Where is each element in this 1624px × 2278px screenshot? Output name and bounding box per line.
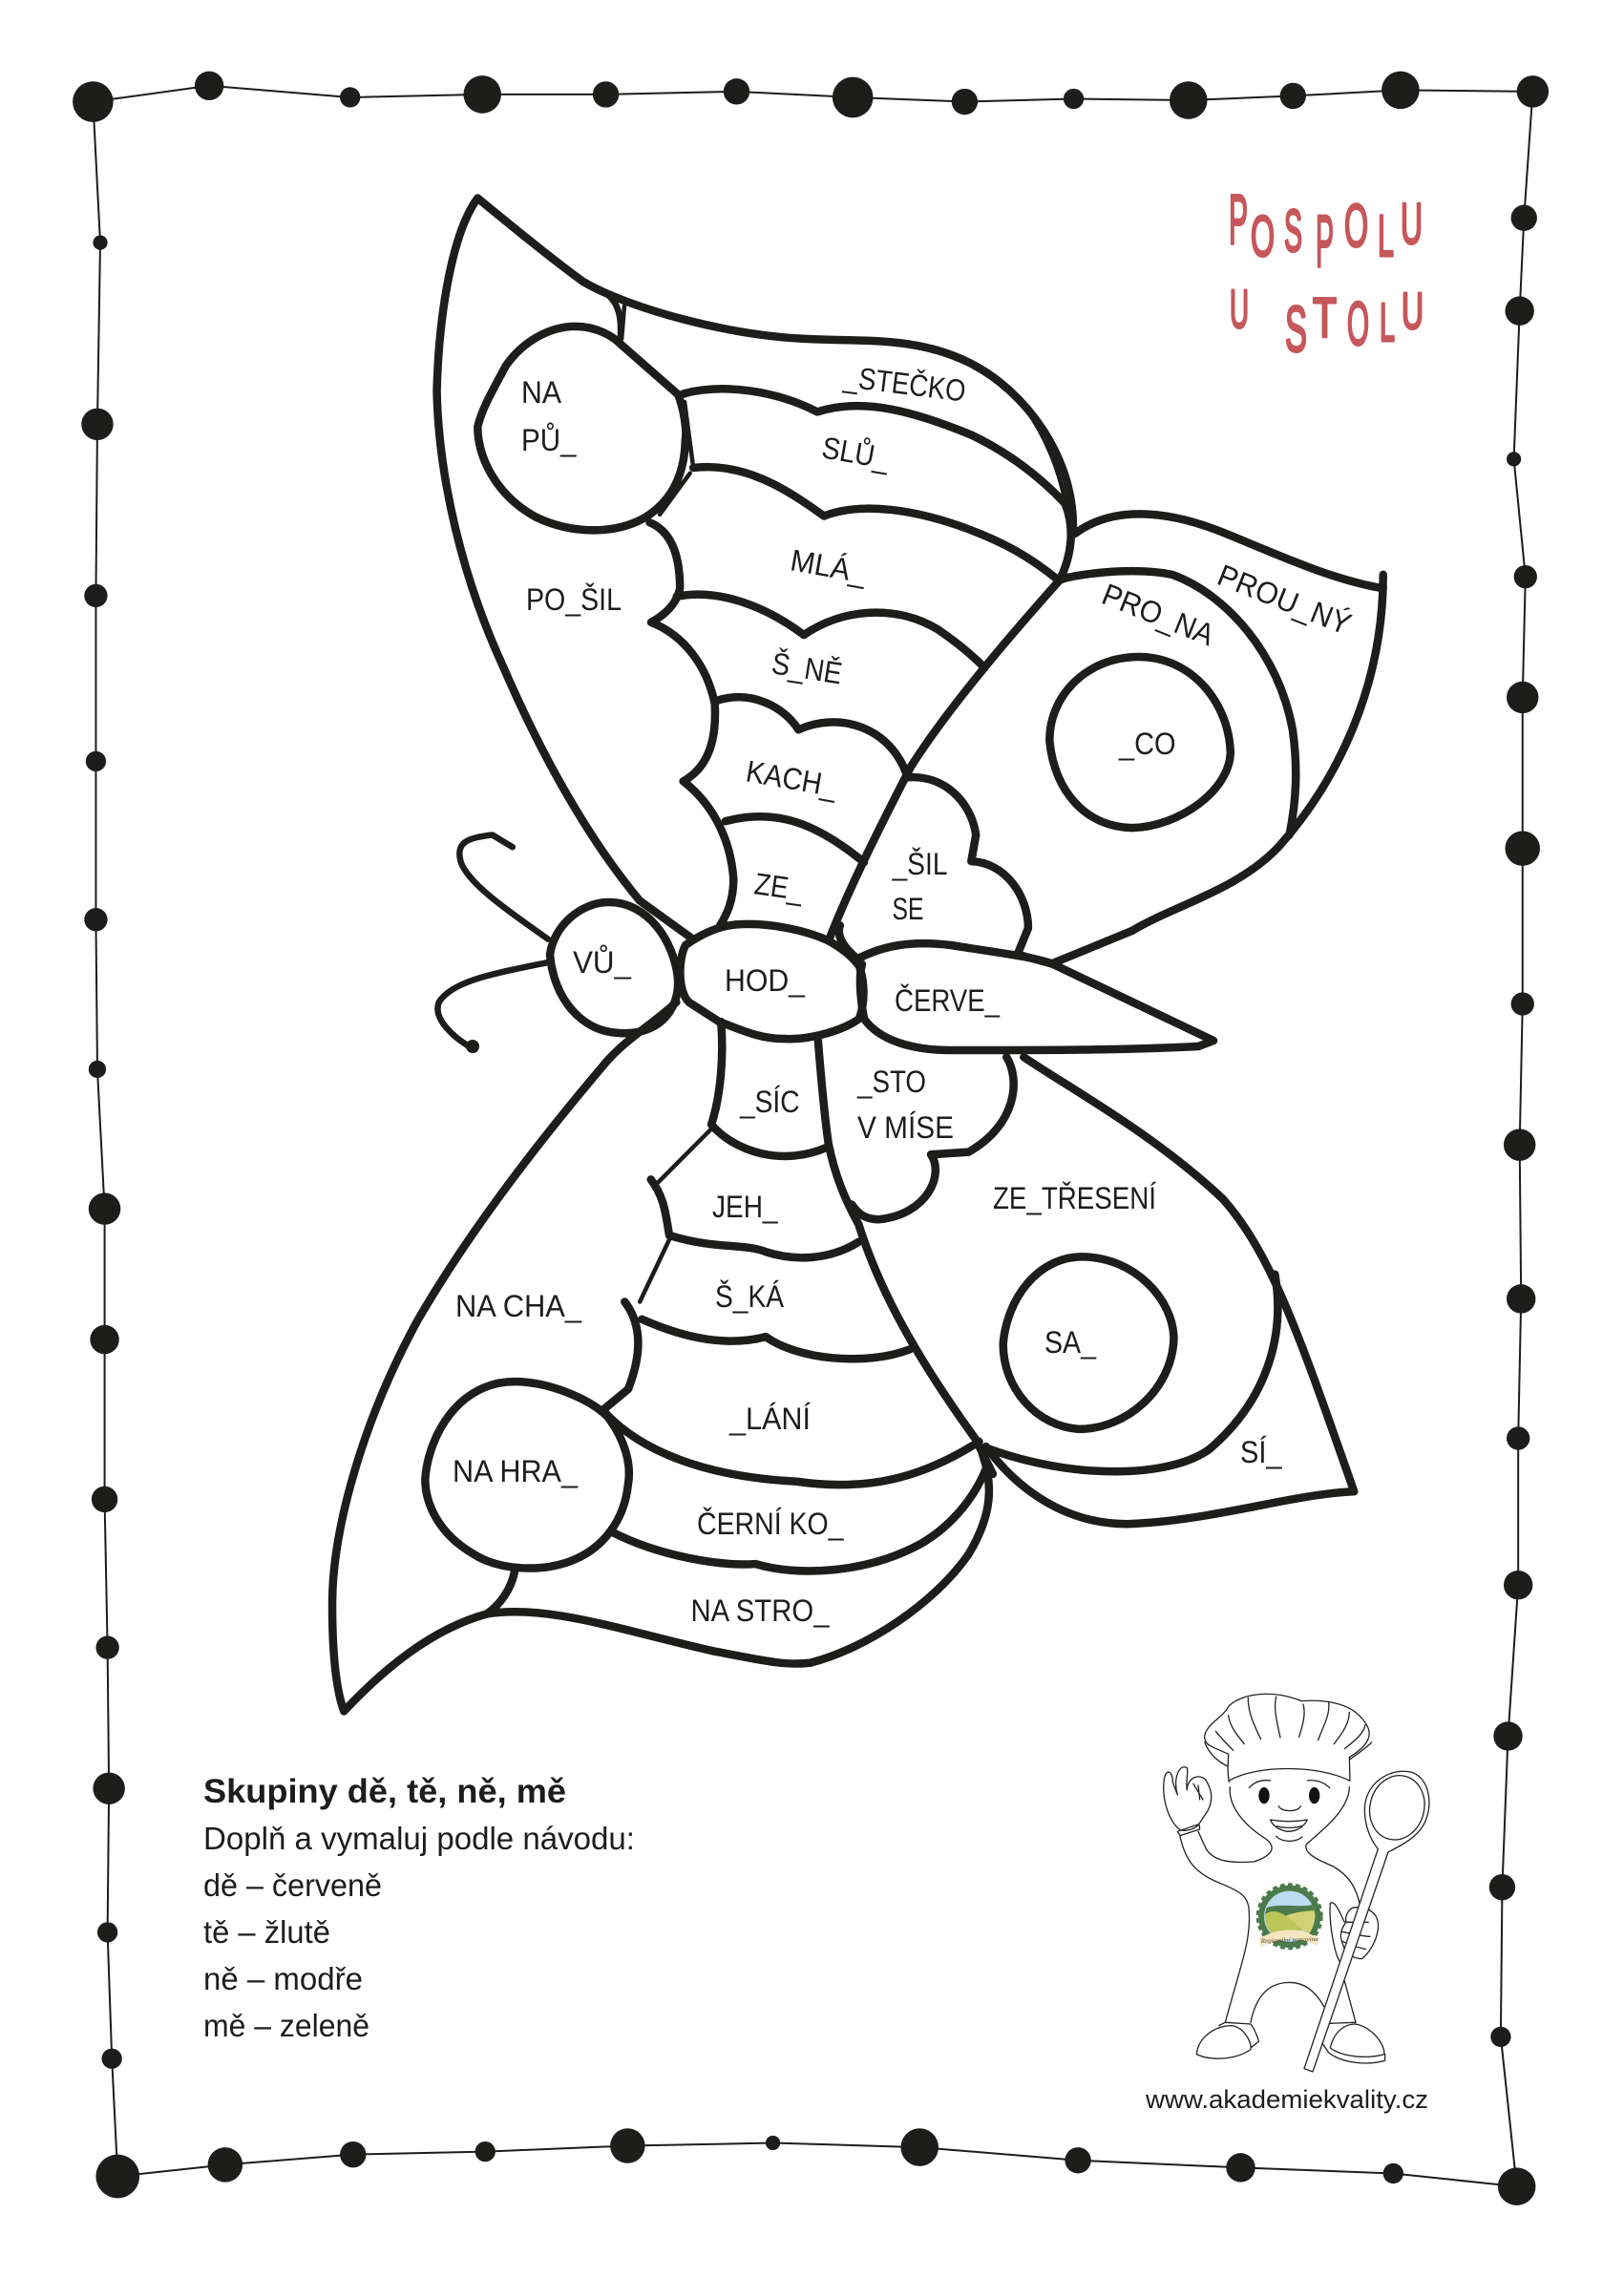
label: NA: NA [521,375,562,410]
label: MLÁ_: MLÁ_ [788,542,870,590]
title: Pospolu u stolu: O [1347,289,1369,358]
label: ČERVE_: ČERVE_ [895,983,1001,1018]
label: Š_KÁ: Š_KÁ [715,1279,785,1314]
heading: Skupiny: Skupiny dě, tě, ně, mě [203,1773,566,1810]
label: _STO: _STO [856,1065,926,1099]
regional food badge: Regionální potravina [1260,1936,1319,1945]
scallop: _ŠIL SE [839,777,1028,958]
legend: tě: tě – žlutě [203,1914,330,1950]
head: VŮ_ [550,902,678,1033]
label: ČERNÍ KO_: ČERNÍ KO_ [697,1507,845,1541]
butterfly word labels [453,359,1356,1628]
butterfly: lower wings and antenna [332,962,1354,1711]
chef face [1249,1781,1330,1841]
chef raised glove [1164,1767,1212,1836]
chef hat [1205,1694,1372,1782]
tail segment: ČERVE_ [856,943,1213,1050]
label: Š_NĚ: Š_NĚ [770,645,845,690]
label: NA CHA_: NA CHA_ [455,1289,582,1323]
label: PRO_NA: PRO_NA [1097,577,1220,652]
antenna tip [466,1040,479,1053]
title: Pospolu u stolu: U [1401,192,1423,256]
label: _STEČKO: _STEČKO [841,359,968,409]
label: VŮ_: VŮ_ [573,945,632,980]
label: _ŠIL: _ŠIL [892,847,947,881]
label: PROU_NÝ: PROU_NÝ [1213,558,1356,642]
upper left wing veins and bands [622,306,1065,515]
wooden spoon [1304,1771,1429,2072]
chef hand on spoon [1340,1908,1379,1959]
lower left wing bands [640,1129,710,1301]
label: SÍ_: SÍ_ [1240,1435,1283,1469]
title: Pospolu u stolu: S [1285,293,1307,366]
body edge [818,1041,993,1474]
wing spot: SA_ [1003,1256,1173,1429]
body segment: HOD_ [680,924,863,1039]
legend: ně: ně – modře [203,1961,363,1996]
label: ZE_TŘESENÍ: ZE_TŘESENÍ [993,1181,1156,1215]
label: _LÁNÍ: _LÁNÍ [728,1402,811,1436]
title: Pospolu u stolu: S [1284,199,1302,264]
title: Pospolu u stolu [1229,181,1424,366]
upper left wing outline [437,199,1073,938]
title: Pospolu u stolu: L [1380,292,1395,353]
butterfly: upper wings and antenna [437,199,1383,963]
lower right wing outline [986,1057,1354,1524]
scallop: _STO V MÍSE [852,1057,1014,1219]
regional food badge [1258,1886,1320,1948]
label: KACH_: KACH_ [744,753,841,804]
title: Pospolu u stolu: T [1313,287,1337,349]
wing spot: _CO [1049,657,1231,828]
title: Pospolu u stolu: U [1402,283,1424,340]
title: Pospolu u stolu: O [1344,193,1368,260]
chef eyes [1258,1787,1319,1803]
label: NA STRO_: NA STRO_ [691,1593,831,1628]
upper antenna [459,835,548,939]
lower antenna [437,962,549,1049]
wing spot: NA HRA_ [425,1382,629,1569]
label: V MÍSE: V MÍSE [857,1110,954,1145]
website url: www.akademiekvality.cz [1145,2085,1428,2114]
lower left wing outline [332,1002,989,1711]
title: Pospolu u stolu: U [1230,279,1249,340]
upper right wing outline [1022,514,1383,963]
label: _CO: _CO [1118,727,1176,761]
legend: dě: dě – červeně [203,1867,382,1903]
title: Pospolu u stolu: L [1378,203,1394,268]
label: JEH_: JEH_ [712,1190,779,1224]
label: SLŮ_: SLŮ_ [819,430,894,475]
title: Pospolu u stolu: P [1316,200,1334,283]
butterfly: head and body [550,902,1213,1050]
label: _SÍC: _SÍC [739,1085,800,1119]
label: PŮ_: PŮ_ [521,423,578,457]
chef mascot with spoon [1164,1694,1431,2072]
instruction line: Doplň a vymaluj podle návodu: [203,1821,635,1856]
legend: mě: mě – zeleně [203,2008,369,2043]
label: SE: SE [892,892,924,926]
instructions text block [203,1773,635,2043]
wing spot: NA PŮ [477,327,685,530]
label: HOD_: HOD_ [725,963,806,998]
label: SA_: SA_ [1044,1325,1097,1360]
label: PO_ŠIL: PO_ŠIL [526,582,622,617]
chef shoes [1196,2022,1385,2063]
label: NA HRA_: NA HRA_ [453,1454,579,1488]
title: Pospolu u stolu: P [1229,181,1248,259]
label: ZE_: ZE_ [752,866,807,907]
chef head and body [1180,1787,1360,2022]
title: Pospolu u stolu: O [1251,204,1275,268]
